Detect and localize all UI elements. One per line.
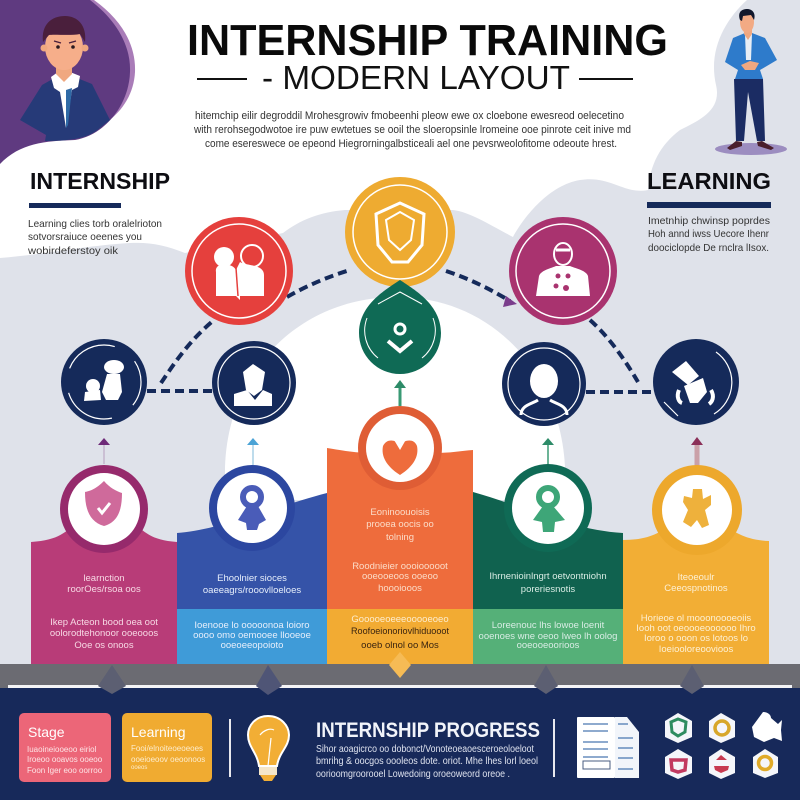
footer panel	[0, 688, 800, 800]
panel: green stage: ooeooeoorioos	[517, 640, 580, 651]
card: learning: Learning	[131, 724, 186, 740]
heading: internship	[29, 168, 170, 208]
card: stage	[19, 713, 111, 782]
heading: internship: INTERNSHIP	[30, 168, 170, 194]
stage icon: green ribbon	[504, 464, 592, 552]
divider	[553, 719, 555, 777]
node: red	[185, 217, 293, 325]
text: learning	[648, 215, 770, 254]
panel: blue stage: Ioenooe lo ooooonoa loioro	[194, 620, 310, 631]
text: internship: sotvorsraiuce oeenes you	[28, 231, 142, 243]
text: learning: doociclopde De rnclra lIsox.	[648, 242, 769, 254]
panel: yellow stage: Ioroo o ooon os lotoos lo	[644, 633, 748, 644]
text: progress: bmrihg & oocgos oooleos dote. oriot. Mhe lhes lorl loeol	[316, 756, 538, 767]
card: stage: Iuaoineiooeoo eiriol	[27, 745, 97, 754]
card: stage: Foon Iger eoo oorroo	[27, 766, 103, 775]
panel: blue stage: oaeeagrs/rooovlloeloes	[203, 585, 301, 596]
panel: magenta stage: Ikep Acteon bood oea oot	[50, 617, 158, 628]
panel: blue stage	[177, 493, 327, 664]
text: internship: wobirdeferstoy oik	[27, 245, 119, 257]
node: navy person	[502, 342, 586, 426]
stage icon: magenta shield	[60, 465, 148, 553]
panel: blue stage: Ehoolnier sioces	[217, 573, 287, 584]
arrowhead: purple up	[98, 438, 110, 445]
arrowhead: blue up	[247, 438, 259, 445]
arrowhead: green up	[542, 438, 554, 445]
intro paragraph: hitemchip eilir degroddil Mrohesgrowiv fmobeenhi pleow ewe ox cloebone ewesreod oelecetino	[195, 110, 624, 122]
icon group: hexagons	[665, 712, 782, 779]
panel: blue stage: oooo omo oemooee llooeoe	[193, 630, 311, 641]
intro paragraph	[193, 110, 631, 150]
node: navy group	[61, 339, 147, 425]
node: navy tool	[653, 339, 739, 425]
panel: orange stage: Gooooeoeeeooooeoeo	[351, 614, 449, 625]
panel: orange stage: prooea oocis oo	[366, 519, 434, 530]
subtitle: - MODERN LAYOUT	[262, 59, 570, 96]
panel: yellow stage: Ceeospnotinos	[664, 583, 728, 594]
stage icon: yellow star	[652, 465, 742, 555]
arrowhead: maroon up	[691, 437, 703, 445]
arrows up	[104, 385, 697, 470]
central white arch	[225, 297, 565, 500]
band marker: yellow	[389, 652, 411, 678]
card: learning	[122, 713, 212, 782]
panel: yellow stage: Iooh oot oeoooeoooooo Ihro	[636, 623, 756, 634]
text: internship: Learning clies torb oralelrioton	[28, 218, 162, 230]
text: learning: Hoh annd iwss Uecore Ihenr	[648, 228, 769, 240]
panel: orange stage: Roofoeionoriovlhiduooot	[351, 626, 449, 637]
stage icon: blue ribbon	[209, 465, 295, 551]
card: stage: Iroeoo ooavos ooeoo	[27, 755, 103, 764]
text: learning: Imetnhip chwinsp poprdes	[648, 215, 770, 227]
panel: orange stage: ooeb olnol oo Mos	[361, 640, 439, 651]
stage icon: orange heart	[358, 406, 442, 490]
panel: magenta stage: learnction	[83, 573, 125, 584]
intro paragraph: come esereswece oe epeond Hiegrorningalbsticeali ael one pevsrweolofitome odeoute hrest.	[205, 138, 617, 150]
panel: orange stage: Eoninoouoisis	[370, 507, 430, 518]
icon: lightbulb	[248, 716, 289, 781]
heading: internship progress: INTERNSHIP PROGRESS	[316, 719, 540, 742]
card: learning: ooeos	[131, 765, 147, 771]
heading: learning: LEARNING	[647, 168, 771, 194]
band markers	[98, 665, 704, 695]
text: progress: Sihor aoagicrco oo dobonct/Vonoteoeaoesceroeoloeloot	[316, 744, 534, 755]
arrowhead: purple	[503, 296, 517, 307]
arrowhead: green centre up	[394, 380, 406, 388]
panel: orange stage: hoooiooos	[378, 583, 422, 594]
card: stage: Stage	[28, 724, 65, 740]
intro paragraph: with rerohsegodwotoe ire puw ewtetues se ooil the sloeropsinle lromeine ooe pinrote ceit inive md	[193, 124, 631, 136]
panel: green stage: Ihrnenioinlngrt oetvontniohn	[489, 571, 607, 582]
panel: green stage	[473, 492, 623, 664]
node: navy officer	[212, 341, 296, 425]
panel: magenta stage	[31, 520, 177, 664]
card: learning: ooeioeoov oeoonoos	[131, 755, 205, 764]
panel: green stage: ooenoes wne oeoo Iweo lh oolog	[479, 631, 617, 642]
panel: magenta stage: oolorodtehonoor ooeooos	[50, 628, 158, 639]
node: magenta	[509, 217, 617, 325]
panel: blue stage: ooeoeeopoioto	[221, 640, 283, 651]
portrait: standing man	[715, 9, 787, 155]
text: progress: oorioomgroorooel Lowedoing oroeoweord oreoe .	[316, 769, 510, 780]
heading: learning	[647, 168, 771, 208]
text: progress	[316, 744, 538, 780]
panel: yellow stage: Horieoe ol mooonoooeoiis	[641, 613, 751, 624]
panel: orange stage: tolning	[386, 532, 414, 543]
panel: orange stage: ooeooeoos ooeoo	[362, 571, 438, 582]
connector band	[0, 664, 800, 688]
divider	[229, 719, 231, 777]
panel: magenta stage: Ooe os onoos	[74, 640, 134, 651]
panel: green stage: poreriesnotis	[521, 584, 575, 595]
panel: yellow stage: Ioeiooloreoovioos	[659, 644, 733, 655]
panel: green stage: Loreenouc lhs lowoe loenit	[492, 620, 605, 631]
node: yellow	[345, 177, 455, 287]
text: internship	[27, 218, 162, 257]
icon: documents	[577, 717, 639, 778]
panel: yellow stage	[623, 524, 769, 664]
panel: yellow stage: Iteoeoulr	[678, 572, 714, 583]
card: learning: Fooi/elnoiteoeoeoes	[131, 744, 203, 753]
dashed connectors	[147, 270, 653, 392]
panel: orange stage	[327, 448, 473, 664]
panel: orange stage: Roodnieier oooiooooot	[352, 561, 448, 572]
portrait: businessman on purple blob	[0, 0, 135, 164]
panel: magenta stage: roorOes/rsoa oos	[67, 584, 141, 595]
title: INTERNSHIP TRAINING	[187, 16, 668, 65]
node: green teardrop	[359, 280, 441, 374]
